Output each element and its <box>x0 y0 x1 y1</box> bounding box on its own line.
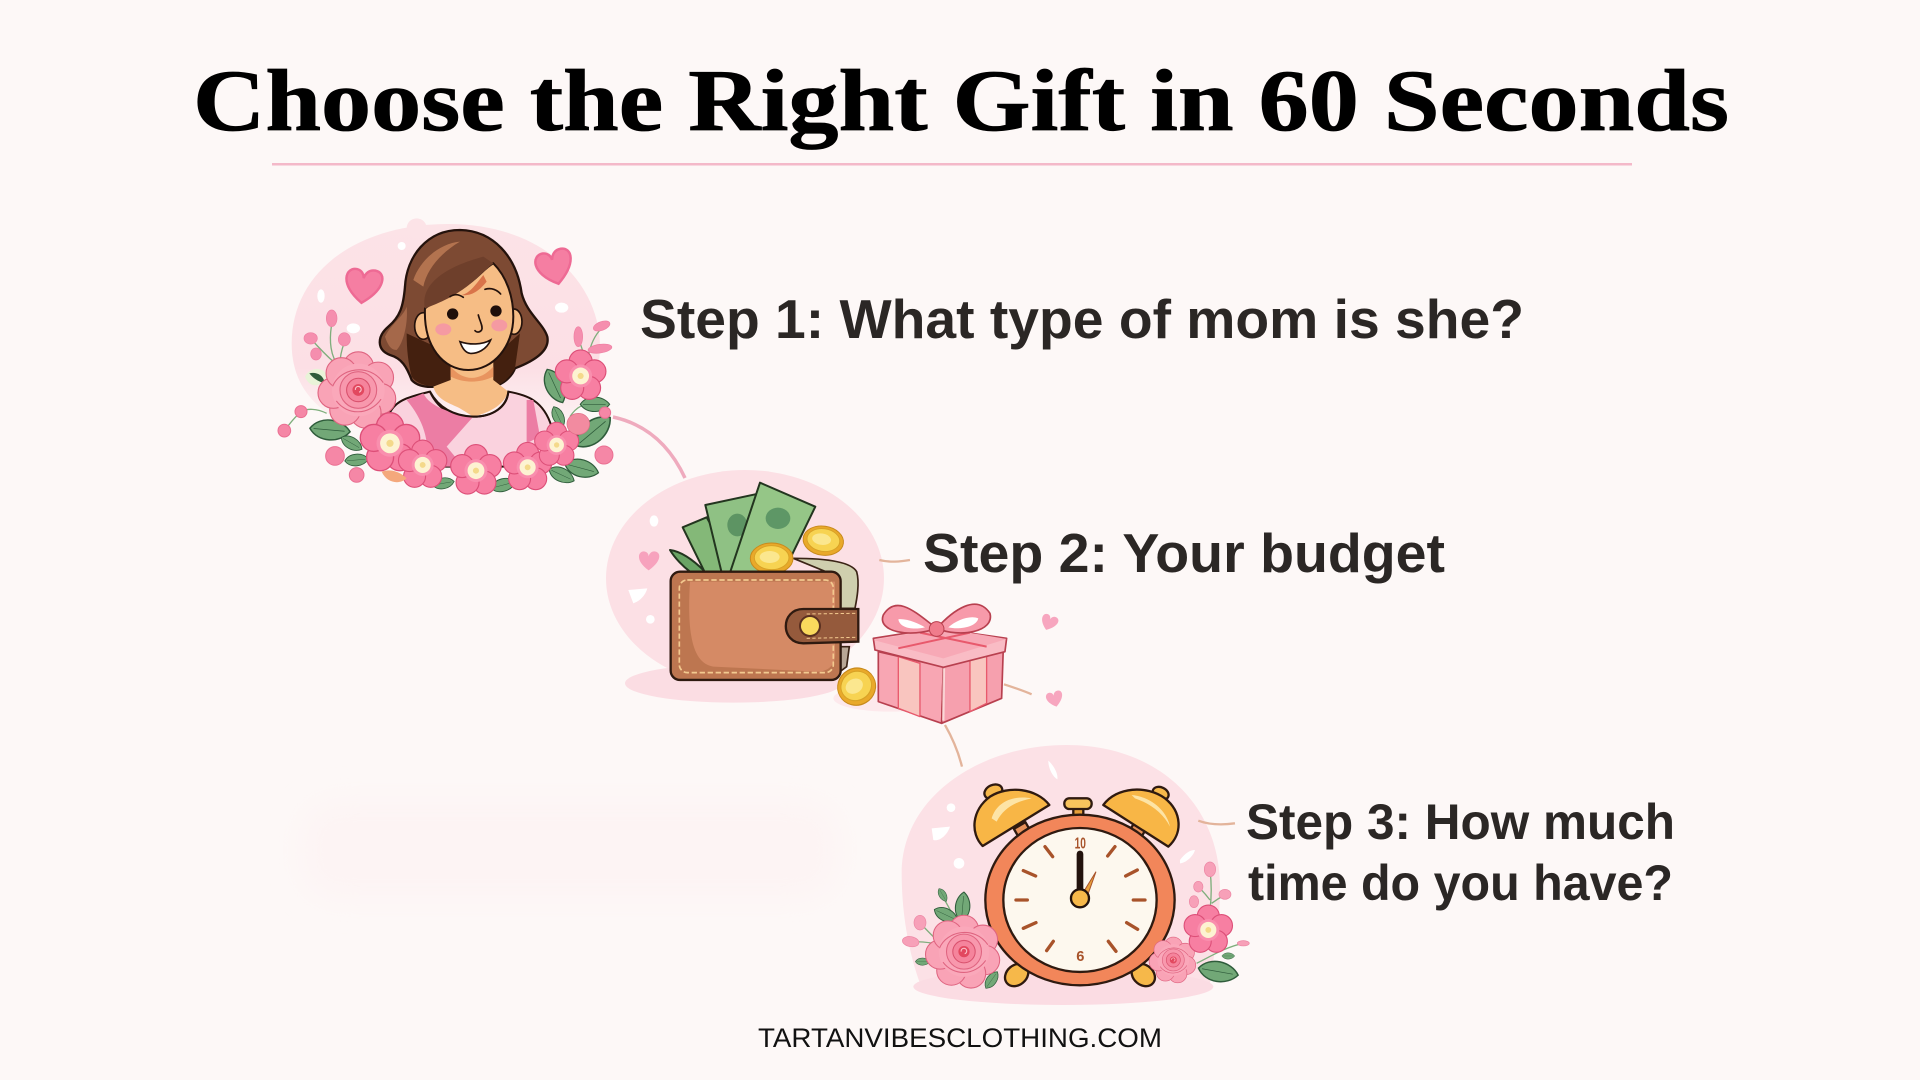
icon: alarm clock with flowers: 10 <box>1075 836 1086 853</box>
title divider <box>272 163 1632 166</box>
heading: step 2: Step 2: Your budget <box>923 522 1445 584</box>
heading: step 3: time do you have? <box>1248 855 1673 911</box>
wallet backdrop circle <box>606 470 884 687</box>
clock flowers <box>912 870 1243 963</box>
footer website: TARTANVIBESCLOTHING.COM <box>758 1023 1162 1053</box>
connector dashes <box>879 560 1032 767</box>
heading: step 3: Step 3: How much <box>1246 794 1675 850</box>
icon: mom with flowers <box>278 218 617 494</box>
icon: alarm clock with flowers: 6 <box>1076 949 1084 965</box>
title: Choose the Right Gift in 60 Seconds <box>193 53 1729 150</box>
coin near gift <box>831 661 882 712</box>
bells <box>974 782 1179 991</box>
small hearts <box>1039 613 1060 633</box>
clock body <box>985 815 1175 985</box>
icon: alarm clock with flowers <box>902 745 1249 1005</box>
heading: step 1: Step 1: What type of mom is she? <box>640 288 1524 350</box>
icon: wallet with cash and gift box <box>606 470 1065 767</box>
clasp <box>786 609 858 643</box>
gift box <box>873 604 1007 723</box>
clock ticks <box>1016 847 1145 951</box>
heading: step 3 <box>1246 794 1675 911</box>
wallet body <box>671 572 841 680</box>
connector: step 1 to step 2 <box>613 417 685 478</box>
bills <box>670 483 815 573</box>
